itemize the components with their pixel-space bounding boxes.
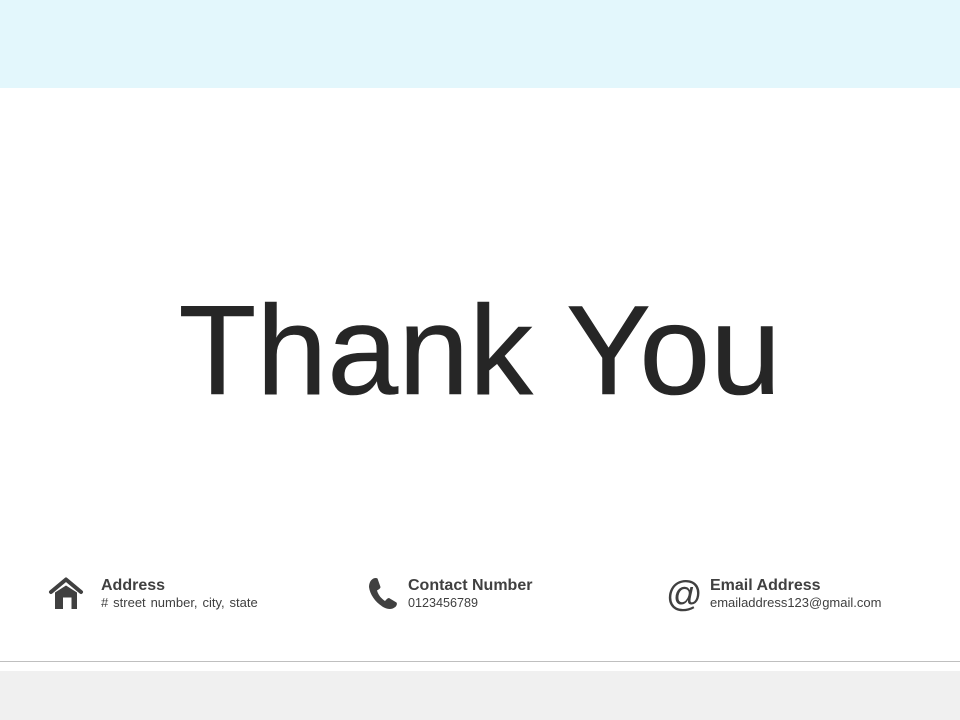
top band [0,0,960,88]
email heading: Email Address [710,577,821,594]
contact heading: Contact Number [408,577,532,594]
contact: address [48,577,258,610]
contact text: 0123456789 [408,596,478,610]
icon: at sign: @ [666,573,703,614]
contact: email [666,573,881,614]
address heading: Address [101,577,165,594]
bottom band [0,671,960,720]
title: Thank You [178,280,781,422]
address text: # street number, city, state [101,595,258,610]
icon: phone [369,578,397,609]
email text: emailaddress123@gmail.com [710,595,881,610]
contact: phone [369,577,532,610]
divider line [0,661,960,662]
icon: house [48,577,84,609]
